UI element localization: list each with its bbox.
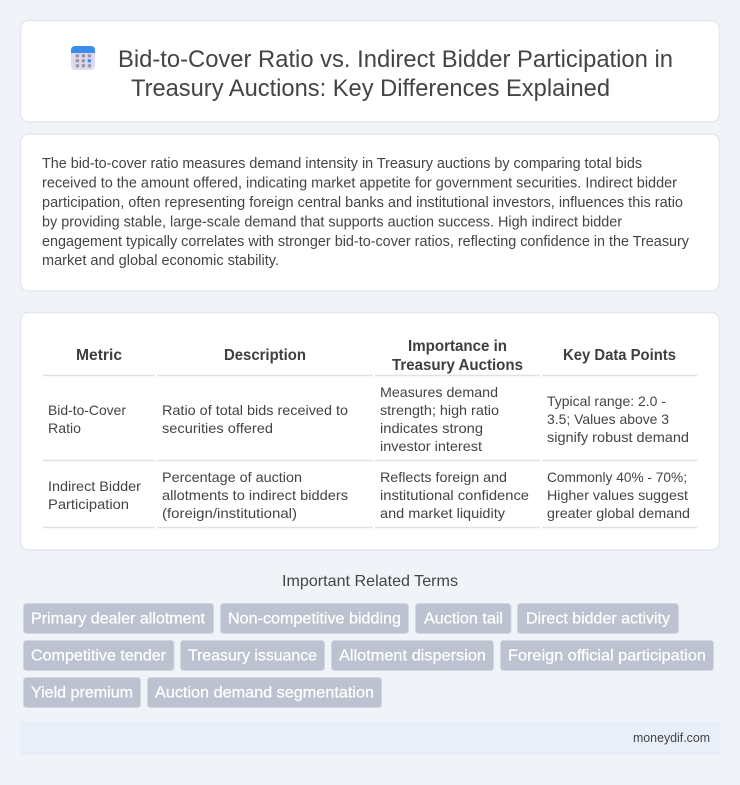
table row: indirect bidder participation: (foreign/institutional) — [162, 505, 297, 521]
table row: bid-to-cover ratio: investor interest — [380, 438, 482, 454]
icon: calendar — [71, 46, 95, 70]
text block: intro — [42, 155, 689, 269]
panel: comparison table — [20, 312, 720, 550]
text block: intro: participation, often representing foreign central banks and institutional investors, influences this ratio — [42, 194, 683, 211]
table row: bid-to-cover ratio: signify robust demand — [547, 429, 689, 445]
panel: related term tags: Competitive tender — [31, 648, 167, 664]
table row: bid-to-cover ratio: indicates strong — [380, 420, 483, 436]
table row: bid-to-cover ratio: securities offered — [162, 420, 273, 436]
table row: indirect bidder participation: and market liquidity — [380, 505, 505, 521]
panel: related term tags: Foreign official participation — [508, 648, 706, 664]
title: Bid-to-Cover Ratio vs. Indirect Bidder Participation in — [118, 46, 673, 73]
panel: related term tags: Primary dealer allotment — [31, 610, 206, 628]
table row: indirect bidder participation: Percentage of auction — [162, 469, 302, 485]
table header row: Treasury Auctions — [392, 357, 523, 374]
table row: indirect bidder participation: greater global demand — [547, 505, 690, 521]
panel: related term tags: Direct bidder activity — [526, 610, 670, 628]
title: Treasury Auctions: Key Differences Explained — [131, 75, 610, 102]
table header row: Key Data Points — [563, 347, 676, 364]
footer: moneydif.com — [633, 730, 710, 745]
heading: related terms: Important Related Terms — [282, 573, 458, 590]
panel: related term tags: Allotment dispersion — [339, 648, 486, 664]
table header row: Description — [224, 347, 306, 364]
title — [118, 46, 673, 102]
table row: bid-to-cover ratio: 3.5; Values above 3 — [547, 411, 669, 427]
table row: indirect bidder participation: Higher values suggest — [547, 487, 688, 503]
table row: indirect bidder participation: Indirect Bidder — [48, 478, 141, 494]
table header row — [76, 338, 676, 374]
table row: indirect bidder participation: institutional confidence — [380, 487, 529, 503]
panel: related term tags: Auction tail — [424, 610, 503, 628]
table row: bid-to-cover ratio: Ratio — [48, 420, 81, 436]
panel: related term tags: Treasury issuance — [188, 648, 317, 664]
table row: bid-to-cover ratio: Ratio of total bids received to — [162, 402, 348, 418]
table row: bid-to-cover ratio: Measures demand — [380, 384, 498, 400]
panel: related term tags: Non-competitive bidding — [228, 610, 401, 628]
table header row: Metric — [76, 347, 122, 364]
text block: intro: market and global economic stability. — [42, 252, 279, 269]
table row: indirect bidder participation — [48, 469, 690, 521]
text block: intro: engagement typically correlates with stronger bid-to-cover ratios, reflecting confidence in the Treasury — [42, 233, 689, 250]
table row: indirect bidder participation: Participation — [48, 496, 129, 512]
footer — [20, 721, 720, 755]
table row: bid-to-cover ratio — [48, 384, 689, 454]
panel: related term tags: Yield premium — [31, 684, 133, 702]
text block: intro: received to the amount offered, indicating market appetite for government securities. Indirect bidder — [42, 174, 677, 192]
table row: bid-to-cover ratio: strength; high ratio — [380, 402, 499, 418]
text block: intro: The bid-to-cover ratio measures demand intensity in Treasury auctions by comparing total bids — [42, 155, 642, 172]
table row: indirect bidder participation: allotments to indirect bidders — [162, 487, 348, 503]
table row: indirect bidder participation: Commonly 40% - 70%; — [547, 469, 687, 485]
panel: intro paragraph — [20, 134, 720, 291]
table header row: Importance in — [408, 338, 507, 355]
table row: indirect bidder participation: Reflects foreign and — [380, 469, 507, 485]
text block: intro: by providing stable, large-scale demand that supports auction success. High indirect bidder — [42, 214, 622, 230]
table row: bid-to-cover ratio: Typical range: 2.0 - — [547, 393, 666, 409]
table row: bid-to-cover ratio: Bid-to-Cover — [48, 402, 126, 418]
panel: related term tags — [24, 604, 714, 708]
panel: header — [20, 20, 720, 122]
panel: related term tags: Auction demand segmentation — [155, 684, 374, 702]
